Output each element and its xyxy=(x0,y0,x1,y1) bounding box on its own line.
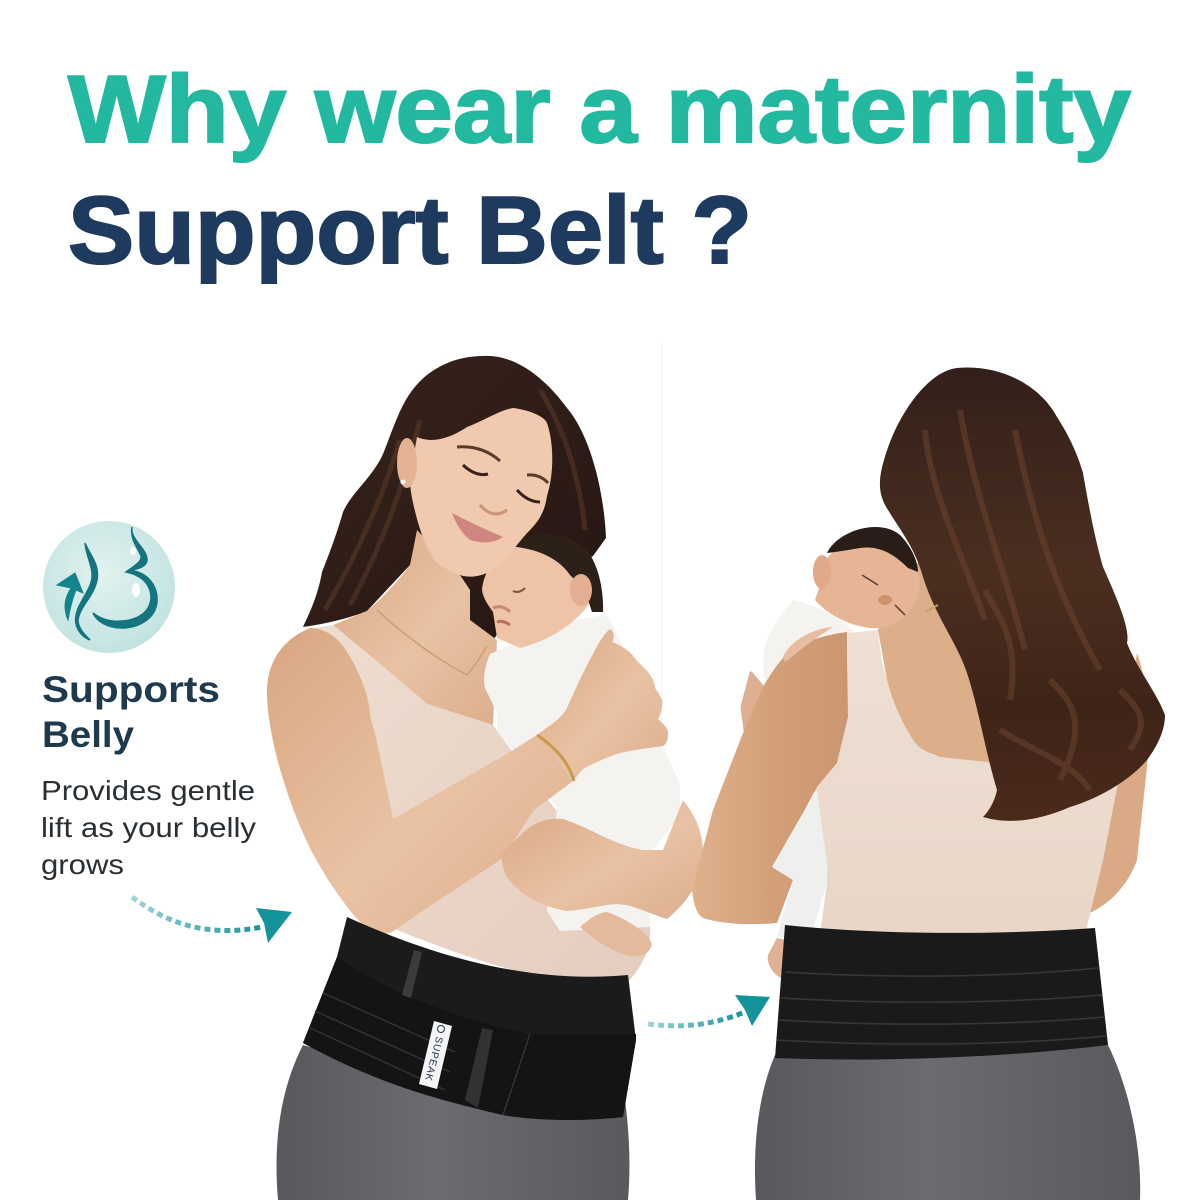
upper hand on baby xyxy=(537,629,668,781)
hair strands xyxy=(925,410,1141,790)
title: Support Belt ? xyxy=(68,177,752,284)
hair back xyxy=(303,356,606,645)
baby fingers on shoulder xyxy=(783,627,833,662)
title: Why wear a maternity xyxy=(68,56,1131,163)
necklace xyxy=(377,610,487,675)
baby upper garment xyxy=(763,600,853,700)
lower hand and forearm xyxy=(502,800,703,919)
hair highlights xyxy=(325,390,585,610)
tank top xyxy=(310,625,650,986)
front belt xyxy=(303,917,636,1120)
smile xyxy=(452,513,503,542)
bracelet xyxy=(537,735,574,781)
text block: description: grows xyxy=(41,849,124,880)
long hair xyxy=(880,368,1165,821)
pants xyxy=(755,1045,1140,1200)
pants xyxy=(277,1045,629,1200)
text block: description xyxy=(41,775,256,880)
baby hand xyxy=(742,673,763,730)
arrow: front belt to back belt xyxy=(648,995,770,1026)
face xyxy=(410,408,552,577)
figure: mother back view xyxy=(692,368,1165,1200)
right arm xyxy=(1085,653,1149,915)
neck and chest xyxy=(333,530,497,725)
earring xyxy=(400,480,406,484)
heading: Supports Belly: Belly xyxy=(42,714,134,755)
icon: belly support badge xyxy=(43,521,175,653)
heading: Supports Belly xyxy=(42,669,220,755)
eyebrows xyxy=(457,447,548,483)
tank top xyxy=(815,630,1117,935)
necklace clasp xyxy=(925,605,938,612)
photo divider xyxy=(661,342,663,800)
nose shadow xyxy=(480,505,507,514)
closed eyes xyxy=(463,465,540,502)
baby foot xyxy=(768,938,802,980)
title xyxy=(68,56,1131,284)
text block: description: lift as your belly xyxy=(41,812,256,843)
ear xyxy=(397,438,417,488)
text block: description: Provides gentle xyxy=(41,775,255,806)
baby body xyxy=(484,615,680,931)
baby head xyxy=(482,534,603,648)
left arm xyxy=(692,632,848,924)
belt label xyxy=(419,1021,452,1089)
figure: mother front view xyxy=(267,356,703,1200)
baby foot xyxy=(580,912,652,956)
baby lower garment xyxy=(772,790,827,940)
back belt xyxy=(775,925,1108,1059)
skin back and neck xyxy=(878,560,1000,780)
belt label: SUPEAK xyxy=(422,1035,444,1083)
baby head xyxy=(813,527,920,628)
arrow: text to front belt xyxy=(132,897,292,943)
heading: Supports Belly: Supports xyxy=(42,669,220,710)
upper arm and forearm xyxy=(267,628,573,934)
